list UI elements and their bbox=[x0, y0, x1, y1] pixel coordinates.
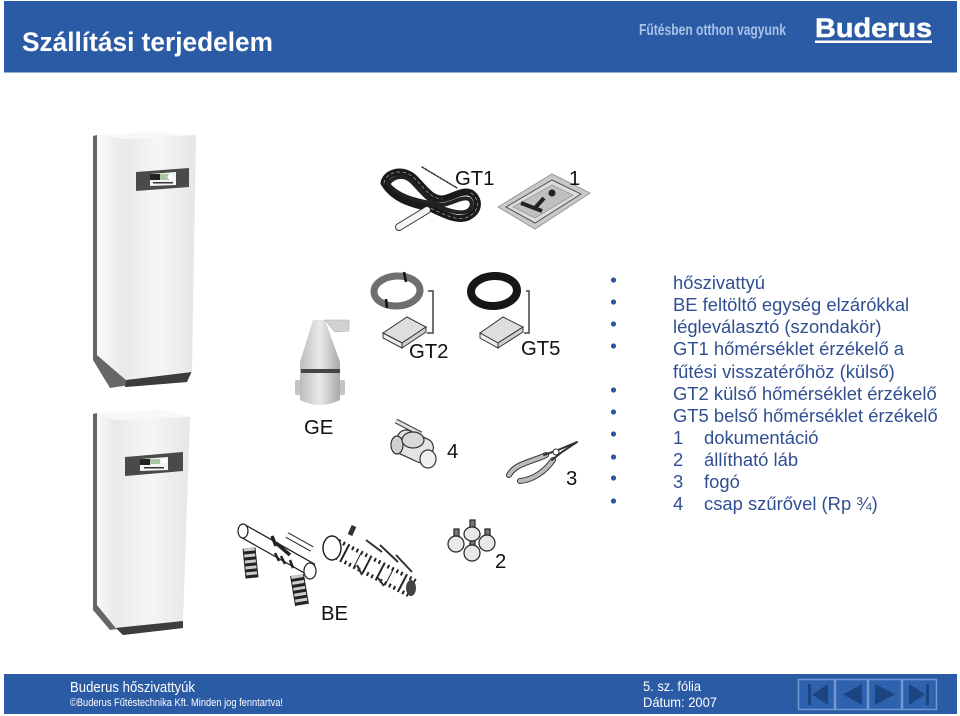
control panel bbox=[136, 168, 189, 191]
slide number: 5. sz. fólia bbox=[643, 678, 701, 694]
list text: 1 bbox=[673, 427, 683, 448]
tagline: Fűtésben otthon vagyunk bbox=[639, 22, 786, 39]
Buderus logo: Buderus bbox=[815, 13, 932, 43]
icon: filling unit right bbox=[323, 526, 416, 596]
list text: GT2 külső hőmérséklet érzékelő bbox=[673, 383, 937, 404]
label: 4: 4 bbox=[447, 441, 458, 463]
list text: GT5 belső hőmérséklet érzékelő bbox=[673, 405, 938, 426]
label: GT5: GT5 bbox=[521, 338, 560, 360]
list text: 4 bbox=[673, 493, 683, 514]
icon: adjustable feet bbox=[448, 520, 495, 561]
list text: fogó bbox=[704, 471, 740, 492]
footer product name: Buderus hőszivattyúk bbox=[70, 680, 196, 696]
list text: BE feltöltő egység elzárókkal bbox=[673, 294, 909, 315]
date: Dátum: 2007 bbox=[643, 694, 717, 710]
list text: GT1 hőmérséklet érzékelő a bbox=[673, 338, 905, 359]
list text: légleválasztó (szondakör) bbox=[673, 316, 882, 337]
list text: állítható láb bbox=[704, 449, 798, 470]
footer bar bbox=[4, 674, 957, 714]
list text: fűtési visszatérőhöz (külső) bbox=[673, 361, 895, 382]
control panel bbox=[125, 452, 183, 476]
icon: ball valve with filter bbox=[391, 421, 436, 468]
label: GE: GE bbox=[304, 417, 333, 439]
label: 3: 3 bbox=[566, 468, 577, 490]
header bar bbox=[4, 1, 957, 72]
bullet markers bbox=[611, 277, 616, 504]
navigation buttons bbox=[798, 680, 936, 710]
list text: hőszivattyú bbox=[673, 272, 765, 293]
list text: 3 bbox=[673, 471, 683, 492]
icon: filling unit left bbox=[238, 524, 316, 605]
icon: GT5 sensor set bbox=[470, 275, 529, 348]
illustration: top heat pump bbox=[93, 132, 196, 388]
list text: dokumentáció bbox=[704, 427, 819, 448]
label: GT2: GT2 bbox=[409, 341, 448, 363]
label: 2: 2 bbox=[495, 551, 506, 573]
label: 1: 1 bbox=[569, 168, 580, 190]
list text bbox=[673, 272, 938, 514]
copyright: ©Buderus Fűtéstechnika Kft. Minden jog fenntartva! bbox=[70, 697, 283, 709]
label: GT1: GT1 bbox=[455, 168, 494, 190]
label: BE: BE bbox=[321, 603, 348, 625]
icon: documentation booklet bbox=[498, 174, 590, 229]
icon: air separator bbox=[295, 320, 349, 405]
list text: csap szűrővel (Rp ¾) bbox=[704, 493, 878, 514]
bullet list of delivered items bbox=[611, 272, 938, 514]
icon: GT1 sensor cable bbox=[384, 167, 477, 227]
icon: GT2 sensor set bbox=[373, 272, 433, 348]
icon: pliers bbox=[509, 442, 577, 481]
list text: 2 bbox=[673, 449, 683, 470]
title: Szállítási terjedelem bbox=[22, 27, 273, 57]
illustration: bottom heat pump bbox=[93, 410, 190, 635]
